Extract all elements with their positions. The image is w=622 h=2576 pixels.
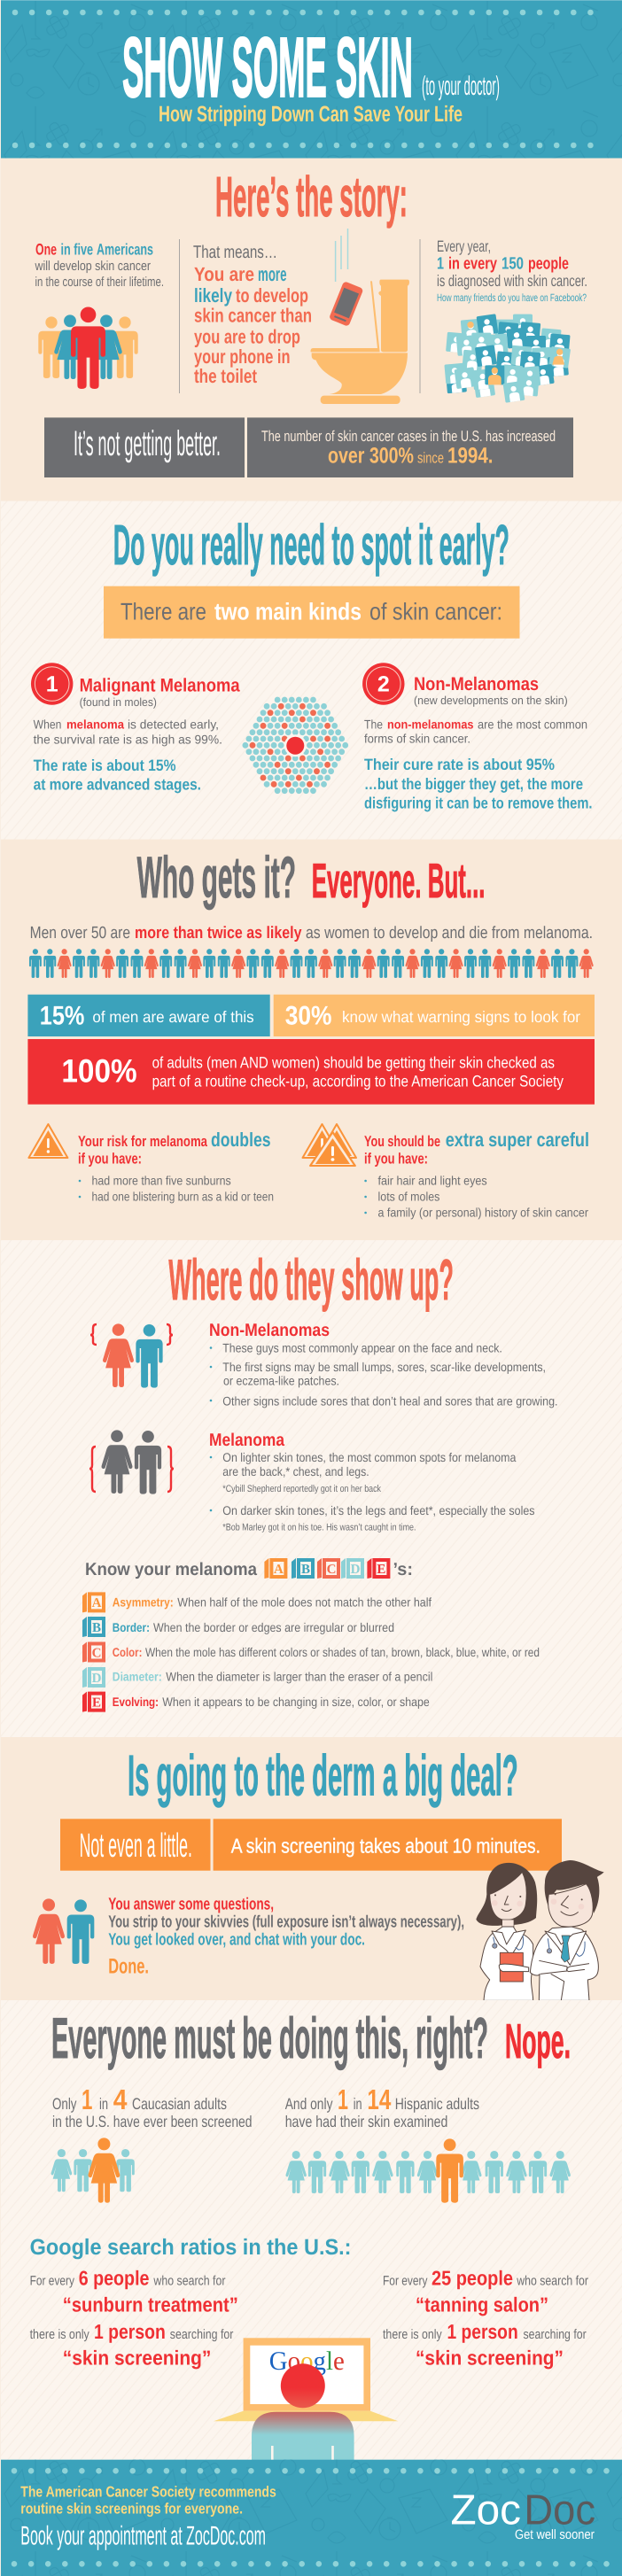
text: screening steps: You strip to your skivvies (full exposure isn’t always necessary), [108,1913,464,1932]
text: 1 in 4 Caucasian adults: Only [52,2095,76,2113]
icon: group of five people [38,306,138,389]
badge: number 1: 1 [46,671,58,696]
text: that means: You are [194,263,254,285]
logo: ZocDoc: Get well sooner [515,2527,595,2542]
text: tanning salon ratio: there is only [383,2327,442,2342]
text: non-melanomas: The [364,718,383,732]
text: 1 in every 150 people: in every [448,255,497,274]
callout: cases increased over 300%: over 300% [328,443,414,468]
panel: going to the derm [0,1737,622,2000]
heading: know your melanoma ABCDEs: ’s: [393,1560,413,1579]
text: 1 in 4 Caucasian adults: in [99,2095,108,2113]
subtitle: How Stripping Down Can Save Your Life [159,102,463,127]
text: men over 50: Men over 50 are [30,924,130,943]
text: that means: the toilet [194,365,258,387]
item: evolving: When it appears to be changing in size, color, or shape [162,1695,430,1709]
text: that means: likely [194,284,233,306]
stat: 15% of men: 15% [40,1002,84,1031]
text: 1 in every 150 people [437,237,587,304]
stat: 30% know warning signs: 30% [285,1002,331,1031]
text: 1 in 4 Caucasian adults [52,2083,252,2130]
text: american cancer society recommendation: routine skin screenings for everyone. [20,2500,243,2517]
text: sunburn treatment ratio: there is only [30,2327,89,2342]
text: that means: your phone in [194,345,291,368]
text: tanning salon ratio: “tanning salon” [416,2293,548,2316]
text: sunburn treatment ratio: searching for [170,2327,233,2342]
text: tanning salon ratio [383,2266,588,2369]
text: call to action: Book your appointment at ZocDoc.com [20,2522,266,2551]
text: melanoma list: *Cybill Shepherd reportedly got it on her back [222,1484,381,1494]
text: sunburn treatment ratio: For every [30,2273,74,2288]
item: color: When the mole has different colors or shades of tan, brown, black, blue, white, or red [145,1645,540,1659]
heading: know your melanoma ABCDEs [85,1558,413,1579]
stat: 15% of men: of men are aware of this [92,1008,254,1026]
item: border: B [92,1621,101,1635]
text: 1 in 14 Hispanic adults: 1 [338,2083,348,2115]
text: non-melanomas: non-melanomas [387,718,474,732]
text: tanning salon ratio: 25 people [432,2266,513,2289]
panel: who gets it [0,840,622,1240]
item: diameter: D [92,1672,102,1686]
banner: not even a little [60,1819,211,1871]
callout: cases increased over 300%: 1994. [447,443,493,468]
text: extra super careful: extra super careful [446,1129,589,1151]
banner: takes about 10 minutes [214,1819,562,1871]
text: screening steps: You answer some questions, [108,1896,274,1914]
text: 1 in 4 Caucasian adults: in the U.S. have ever been screened [52,2113,252,2130]
text: one in five Americans: One [35,241,57,259]
text: non-melanomas: forms of skin cancer. [364,732,470,746]
text: 1 in 4 Caucasian adults: 4 [113,2083,128,2115]
stat: 15% of men [27,995,270,1036]
text: melanoma list: are the back,* chest, and legs. [222,1464,369,1478]
stat: 30% know warning signs: know what warning signs to look for [342,1008,580,1026]
banner: two main kinds: two main kinds [214,598,362,625]
text: non-melanomas list: or eczema-like patches. [223,1374,339,1388]
text: that means: you are to drop [194,326,300,347]
text: risk doubles: doubles [211,1129,271,1151]
heading: know your melanoma ABCDEs: D [351,1563,361,1577]
text: 1 in 14 Hispanic adults [285,2083,479,2130]
text: one in five Americans: in the course of their lifetime. [35,275,164,290]
text: men over 50: more than twice as likely [135,924,302,943]
callout: it's not getting better: It’s not getting better. [74,424,221,463]
text: tanning salon ratio: searching for [523,2327,587,2342]
text: non-melanomas: are the most common [478,718,587,732]
icon: 1 of 4 figures [51,2138,135,2203]
text: sunburn treatment ratio: 6 people [79,2266,149,2289]
text: sunburn treatment ratio: “skin screening” [63,2346,211,2369]
illustration: person at laptop with Google: Google [269,2347,345,2376]
badge: number 2: 2 [377,671,390,696]
text: 1 in every 150 people: people [528,255,569,274]
text: non-melanomas: Non-Melanomas [414,674,539,694]
item: border: Border: [113,1620,150,1634]
text: risk doubles: Your risk for melanoma [78,1133,207,1150]
text: that means: That means… [193,243,277,262]
text: 1 in 14 Hispanic adults: have had their skin examined [285,2113,447,2130]
item: border: When the border or edges are irregular or blurred [153,1620,394,1634]
text: extra super careful: lots of moles [377,1190,439,1204]
text: malignant melanoma: melanoma [66,718,124,732]
text: one in five Americans: in five [60,241,93,259]
logo: ZocDoc: Doc [524,2487,595,2533]
item: evolving: E [92,1696,101,1711]
item: border [82,1617,394,1637]
icon: non-melanoma figures in braces [90,1323,173,1388]
text: malignant melanoma: Malignant Melanoma [80,676,240,696]
text: non-melanomas list: The first signs may be small lumps, sores, scar-like developments, [222,1360,546,1374]
item: diameter [82,1667,432,1688]
stat: 100% of adults [27,1039,595,1105]
text: american cancer society recommendation: The American Cancer Society recommends [20,2484,276,2501]
stat: 100% of adults: of adults (men AND women) should be getting their skin checked as [152,1054,555,1072]
text: malignant melanoma: (found in moles) [80,695,157,709]
text: men over 50 [30,924,593,943]
heading: know your melanoma ABCDEs: B [301,1563,310,1577]
text: tanning salon ratio: “skin screening” [416,2346,564,2369]
text: 1 in every 150 people: 1 [437,255,444,274]
text: risk doubles: if you have: [78,1150,142,1167]
text: non-melanomas list [209,1321,558,1408]
text: sunburn treatment ratio: 1 person [94,2320,166,2343]
illustration: two doctors [476,1860,604,2000]
icon: phone dropping in toilet [311,229,409,404]
text: risk doubles: had one blistering burn as a kid or teen [92,1190,274,1204]
text: melanoma list: *Bob Marley got it on his toe. His wasn’t caught in time. [222,1522,416,1532]
text: 1 in 14 Hispanic adults: 14 [367,2083,391,2115]
icon row: men and women [29,949,594,978]
text: screening steps [108,1896,464,1979]
badge: number 2 [362,663,404,705]
item: color [82,1642,540,1662]
callout: it's not getting better [44,417,245,477]
text: 1 in 14 Hispanic adults: in [354,2095,362,2113]
heading: know your melanoma ABCDEs: A [274,1563,284,1577]
text: tanning salon ratio: who search for [516,2273,588,2288]
item: asymmetry: A [92,1596,102,1610]
text: malignant melanoma [34,676,240,794]
text: non-melanomas: Their cure rate is about 95% [364,756,555,773]
text: risk doubles: had more than five sunburns [92,1174,231,1188]
icon: 1 of 14 figures [285,2138,571,2203]
text: screening steps: Done. [108,1955,149,1979]
icon: three warning triangles [303,1124,356,1166]
logo: ZocDoc: Zoc [450,2487,521,2533]
icon: melanoma figures in braces [89,1430,174,1494]
text: 1 in 14 Hispanic adults: And only [285,2095,333,2113]
badge: number 1 [31,663,73,705]
callout: cases increased over 300%: since [417,450,444,466]
text: tanning salon ratio: For every [383,2273,428,2288]
text: melanoma list: Melanoma [209,1431,285,1450]
text: malignant melanoma: is detected early, [128,718,219,732]
text: non-melanomas: …but the bigger they get, the more [364,775,583,793]
text: one in five Americans: Americans [97,241,153,259]
text: tanning salon ratio: 1 person [447,2320,518,2343]
text: one in five Americans [35,241,164,290]
heading: who gets it: Who gets it? [137,844,296,910]
banner: two main kinds [104,586,519,639]
text: sunburn treatment ratio: “sunburn treatment” [63,2293,238,2316]
text: malignant melanoma: When [34,718,61,732]
text: risk doubles [78,1129,274,1204]
text: extra super careful [364,1129,589,1219]
text: sunburn treatment ratio: who search for [153,2273,225,2288]
panel: spot it early [0,501,622,840]
text: malignant melanoma: The rate is about 15% [34,757,175,774]
text: that means [193,243,312,387]
icon: mole of dots [245,700,346,791]
text: non-melanomas list: Other signs include sores that don’t heal and sores that are growing. [222,1393,558,1408]
stat: 100% of adults: 100% [61,1053,137,1090]
panel: page header: (to your doctor) [422,72,500,101]
text: extra super careful: a family (or personal) history of skin cancer [377,1205,588,1219]
panel: everyone must be doing this [0,2000,622,2460]
panel: where do they show up [0,1240,622,1737]
text: 1 in 14 Hispanic adults: Hispanic adults [395,2095,479,2113]
text: screening steps: You get looked over, and chat with your doc. [108,1931,365,1950]
logo: ZocDoc [450,2487,595,2542]
icon: cluster of friend photos [444,314,571,403]
text: 1 in every 150 people: Every year, [437,237,491,255]
heading: know your melanoma ABCDEs: E [377,1563,385,1577]
text: melanoma list: On lighter skin tones, the most common spots for melanoma [222,1450,517,1464]
item: color: Color: [113,1645,142,1659]
text: non-melanomas list: These guys most commonly appear on the face and neck. [222,1340,502,1354]
heading: google search ratios: Google search ratios in the U.S.: [30,2235,351,2260]
text: 1 in every 150 people: 150 [501,255,524,274]
text: non-melanomas: (new developments on the skin) [414,694,568,707]
item: diameter: When the diameter is larger than the eraser of a pencil [166,1669,432,1683]
text: melanoma list [209,1431,535,1532]
heading: know your melanoma ABCDEs: C [327,1563,336,1577]
text: that means: more [258,263,287,285]
item: diameter: Diameter: [113,1669,162,1683]
text: extra super careful: fair hair and light eyes [377,1174,487,1188]
heading: know your melanoma ABCDEs: Know your melanoma [85,1560,258,1579]
banner: two main kinds: of skin cancer: [369,598,502,625]
text: malignant melanoma: at more advanced stages. [34,776,201,794]
item: color: C [92,1646,101,1660]
text: melanoma list: On darker skin tones, it’s the legs and feet*, especially the soles [222,1503,535,1517]
text: malignant melanoma: the survival rate is as high as 99%. [34,732,222,746]
text: that means: skin cancer than [194,305,312,327]
panel: footer [0,2460,622,2576]
text: 1 in 4 Caucasian adults: 1 [82,2083,92,2115]
item: evolving: Evolving: [113,1695,159,1709]
banner: not even a little: Not even a little. [80,1827,192,1865]
icon: warning triangle [28,1124,67,1158]
text: american cancer society recommendation [20,2484,276,2517]
item: asymmetry [82,1592,432,1612]
callout: cases increased over 300% [247,417,573,477]
text: that means: to develop [236,284,308,306]
text: non-melanomas list: Non-Melanomas [209,1321,330,1340]
panel: here's the story [0,159,622,501]
banner: takes about 10 minutes: A skin screening takes about 10 minutes. [231,1835,540,1858]
icon: patient couple [33,1898,94,1964]
item: asymmetry: When half of the mole does not match the other half [177,1595,432,1610]
text: 1 in 4 Caucasian adults: Caucasian adults [132,2095,227,2113]
item: asymmetry: Asymmetry: [113,1595,174,1610]
illustration: person at laptop with Google [214,2338,398,2460]
text: extra super careful: if you have: [364,1150,428,1167]
item: evolving [82,1692,430,1712]
text: non-melanomas [364,674,592,812]
text: one in five Americans: will develop skin cancer [35,259,151,274]
text: extra super careful: You should be [364,1133,440,1150]
panel: page header [0,0,622,159]
banner: two main kinds: There are [121,598,206,625]
stat: 30% know warning signs [274,995,595,1036]
text: sunburn treatment ratio [30,2266,238,2369]
